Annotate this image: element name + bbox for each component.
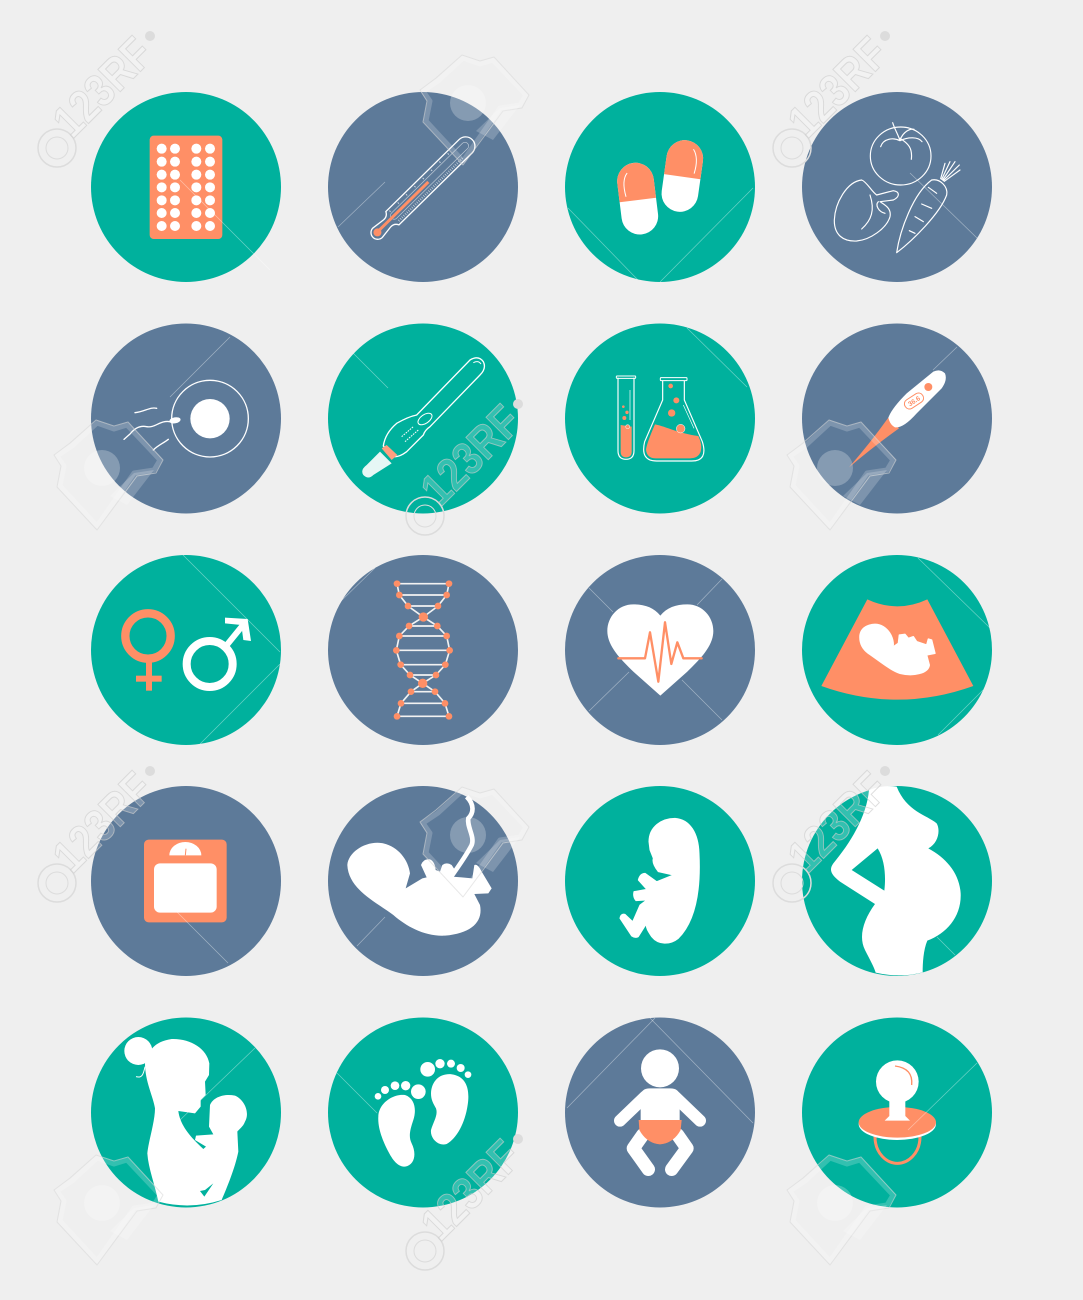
panel: baby footprints (328, 1018, 518, 1208)
watermark: 123RF text marks: 123RF (777, 27, 898, 147)
panel: pacifier (802, 1018, 992, 1208)
panel: mother and baby (91, 1018, 281, 1208)
panel: gender symbols (91, 555, 281, 745)
icon: embryo (620, 818, 699, 943)
icon: bathroom scale (144, 840, 227, 922)
panel: pregnant woman (802, 786, 992, 976)
icon: fetus (347, 797, 492, 936)
icon: tomato, pepper and carrot (834, 123, 960, 253)
watermark: 123RF text marks: 123RF (410, 1130, 531, 1250)
icon: mercury thermometer (366, 133, 479, 244)
icon: DNA double helix (393, 580, 453, 720)
panel: glass thermometer (328, 92, 518, 282)
panel: laboratory glassware (565, 324, 755, 514)
panel: ultrasound (802, 555, 992, 745)
watermark: 123RF text marks: 123RF (42, 762, 163, 882)
panel: DNA (328, 555, 518, 745)
watermark: camera marks (54, 55, 896, 1265)
icon: pacifier (859, 1060, 936, 1163)
icon: ultrasound scan with fetus (821, 599, 973, 700)
panel: pregnancy test (328, 324, 518, 514)
icon: two capsules (615, 138, 705, 237)
panel: digital thermometer (802, 324, 992, 514)
panel: fertilization (91, 324, 281, 514)
panel: baby in diaper (565, 1018, 755, 1208)
icon: footprints (375, 1059, 471, 1167)
icon: digital thermometer (849, 370, 946, 467)
panel: embryo (565, 786, 755, 976)
icon: baby figure (620, 1049, 700, 1169)
panel: heartbeat (565, 555, 755, 745)
thin diagonal guide lines (170, 173, 990, 1130)
watermark: 123RF text marks (38, 27, 898, 1270)
panel: fetus with umbilical cord (328, 786, 518, 976)
icon: female and male symbols (125, 613, 251, 691)
icon: mother holding baby silhouette (124, 1037, 247, 1205)
watermark: 123RF text marks: 123RF (410, 395, 531, 515)
icon: pregnancy test stick (362, 358, 484, 477)
icon: blister pack (150, 136, 222, 239)
icon: digital thermometer: 36.6 (907, 395, 922, 408)
icon: heart with ECG line (607, 604, 713, 696)
panel: contraceptive pills blister (91, 92, 281, 282)
icon: test tube and flask (616, 376, 704, 461)
watermark: 123RF text marks: 123RF (42, 27, 163, 147)
panel: capsules (565, 92, 755, 282)
panel: vegetables (802, 92, 992, 282)
watermark: 123RF text marks: 123RF (777, 762, 898, 882)
icon: pregnant woman silhouette (831, 786, 961, 975)
icon: egg and sperm (124, 380, 248, 457)
panel: weight scale (91, 786, 281, 976)
